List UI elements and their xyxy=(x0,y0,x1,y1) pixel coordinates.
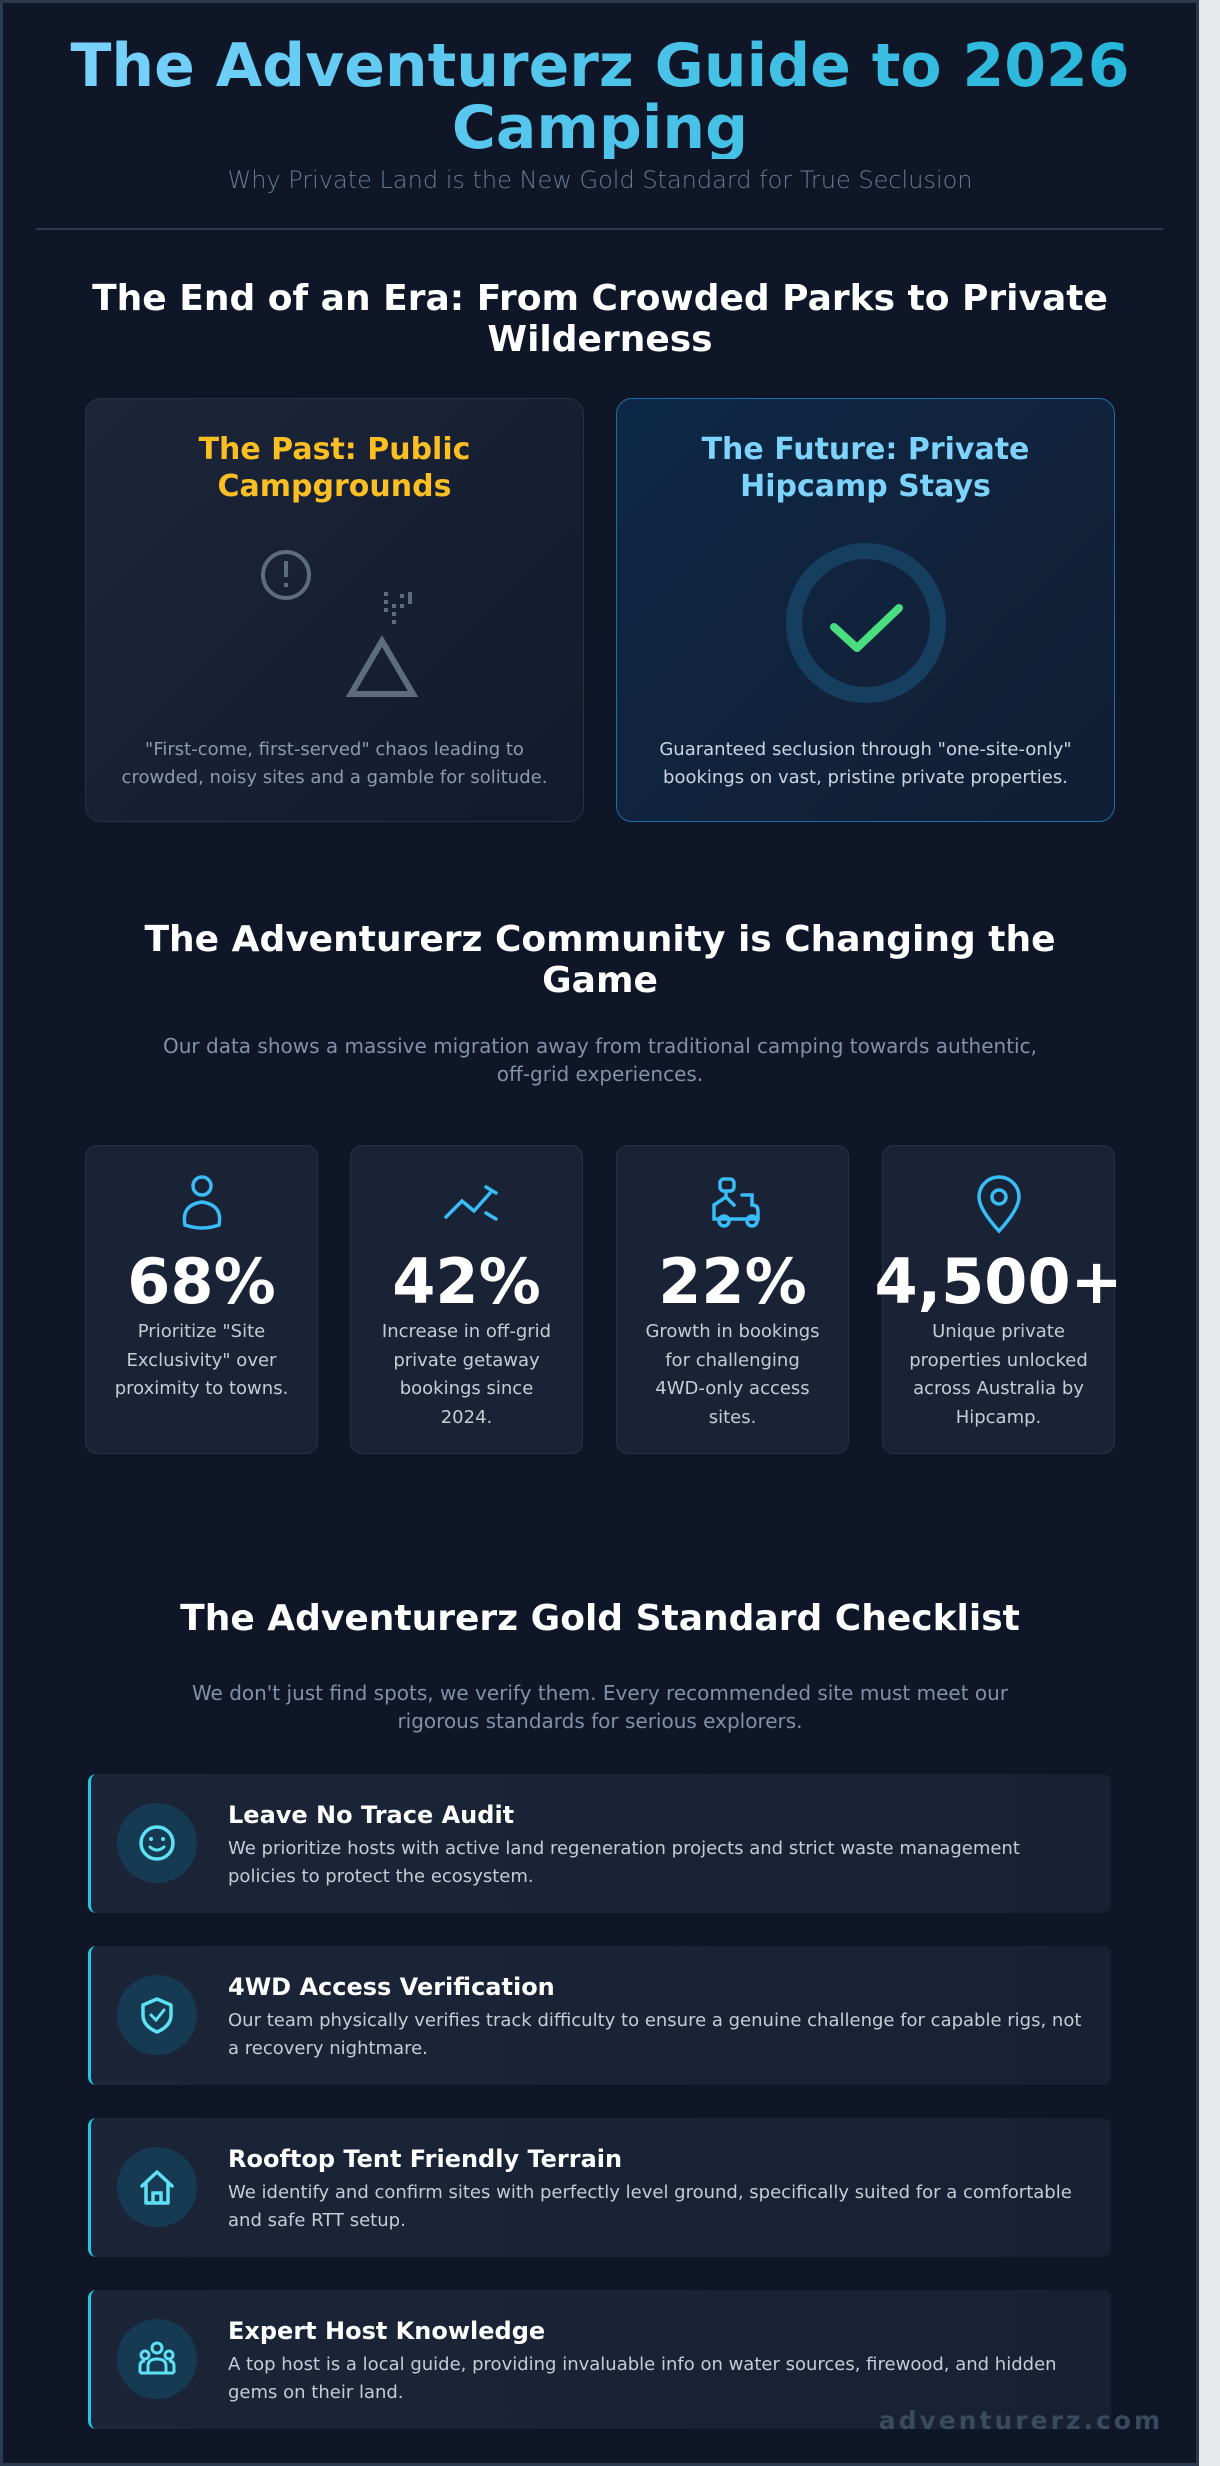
icon: crowd chaos xyxy=(261,550,418,697)
stat: 4,500+: properties unlocked xyxy=(909,1350,1088,1370)
checklist item: 4wd xyxy=(88,1946,1111,2085)
section heading: end of an era: Wilderness xyxy=(487,319,713,360)
section heading: checklist: The Adventurerz Gold Standard Checklist xyxy=(180,1598,1020,1639)
icon: map pin xyxy=(977,1175,1021,1234)
text: checklist intro: We don't just find spots, we verify them. Every recommended site must meet our xyxy=(192,1681,1008,1705)
stat: 68% xyxy=(85,1145,318,1454)
section heading: end of an era xyxy=(92,278,1108,360)
checklist item: expert host: Expert Host Knowledge xyxy=(228,2317,545,2345)
stat: 4,500+: Unique private xyxy=(932,1321,1065,1342)
checklist item: expert host: gems on their land. xyxy=(228,2382,404,2403)
checklist item: rooftop tent xyxy=(88,2118,1111,2257)
stat: 4,500+: across Australia by xyxy=(913,1378,1084,1399)
checklist item: leave no trace xyxy=(88,1774,1111,1913)
heading: future xyxy=(702,432,1029,504)
panel: future xyxy=(616,398,1115,822)
stat: 68%: Exclusivity" over xyxy=(127,1350,276,1370)
checklist item: expert host xyxy=(88,2290,1111,2429)
heading: past: Campgrounds xyxy=(218,469,451,504)
heading: future: Hipcamp Stays xyxy=(740,469,991,504)
text: checklist intro xyxy=(192,1681,1008,1733)
panel: past xyxy=(85,398,584,822)
stat: 42%: private getaway xyxy=(393,1350,540,1370)
stat: 22%: 4WD-only access xyxy=(655,1378,810,1399)
section heading: community: Game xyxy=(542,960,658,1001)
section heading: community: The Adventurerz Community is Changing the xyxy=(144,919,1056,960)
title xyxy=(20,35,1180,159)
icon: trend xyxy=(444,1185,498,1221)
watermark: adventurerz.com xyxy=(879,2406,1163,2435)
icon: person xyxy=(182,1175,222,1230)
text: checklist intro: rigorous standards for serious explorers. xyxy=(397,1709,803,1733)
checklist item: leave no trace: policies to protect the ecosystem. xyxy=(228,1866,534,1887)
stat: 68%: Prioritize "Site xyxy=(138,1321,265,1342)
icon: 4wd xyxy=(712,1177,760,1228)
text: past: crowded, noisy sites and a gamble for solitude. xyxy=(122,767,547,788)
stat: 42%: 2024. xyxy=(441,1406,492,1428)
checklist item: 4wd: Our team physically verifies track difficulty to ensure a genuine challenge for capable rigs, not xyxy=(228,2010,1081,2031)
stat: 22%: for challenging xyxy=(665,1350,800,1370)
title: The Adventurerz Guide to 2026 xyxy=(70,31,1130,101)
stat: 22%: Growth in bookings xyxy=(645,1321,820,1342)
text: past xyxy=(122,739,547,788)
checklist item: rooftop tent: We identify and confirm sites with perfectly level ground, specifically suited for a comfortable xyxy=(228,2182,1072,2203)
subtitle: Why Private Land is the New Gold Standard for True Seclusion xyxy=(227,166,973,194)
icon: check circle xyxy=(786,543,946,703)
stat: 42%: Increase in off-grid xyxy=(382,1321,551,1342)
checklist item: rooftop tent: Rooftop Tent Friendly Terrain xyxy=(228,2145,622,2173)
checklist item: leave no trace: We prioritize hosts with active land regeneration projects and strict waste management xyxy=(228,1838,1020,1859)
text: community intro xyxy=(163,1034,1037,1086)
stat: 42%: bookings since xyxy=(400,1378,533,1399)
text: community intro: Our data shows a massive migration away from traditional camping towards authentic, xyxy=(163,1034,1037,1058)
stat: 4,500+: Hipcamp. xyxy=(956,1406,1041,1428)
stat: 4,500+ xyxy=(882,1145,1115,1454)
stat: 22%: 22% xyxy=(658,1245,807,1318)
heading: past xyxy=(198,432,470,504)
stat: 68%: 68% xyxy=(127,1245,276,1318)
text: future: bookings on vast, pristine private properties. xyxy=(663,767,1068,788)
stat: 22% xyxy=(616,1145,849,1454)
heading: future: The Future: Private xyxy=(702,432,1029,467)
stat: 68%: proximity to towns. xyxy=(115,1378,288,1399)
icon: group xyxy=(117,2319,197,2399)
stat: 42%: 42% xyxy=(392,1245,541,1318)
checklist item: 4wd: a recovery nightmare. xyxy=(228,2038,428,2059)
section heading: community xyxy=(144,919,1056,1001)
text: future: Guaranteed seclusion through "one-site-only" xyxy=(659,739,1072,760)
icon: shield xyxy=(117,1975,197,2055)
text: future xyxy=(659,739,1072,788)
heading: past: The Past: Public xyxy=(199,432,470,467)
text: past: "First-come, first-served" chaos leading to xyxy=(145,739,524,760)
title: Camping xyxy=(452,93,748,163)
checklist item: expert host: A top host is a local guide, providing invaluable info on water sources, firewood, and hidden xyxy=(228,2354,1057,2375)
icon: house xyxy=(117,2147,197,2227)
checklist item: rooftop tent: and safe RTT setup. xyxy=(228,2210,406,2231)
stat: 42% xyxy=(350,1145,583,1454)
checklist item: leave no trace: Leave No Trace Audit xyxy=(228,1801,514,1829)
checklist item: 4wd: 4WD Access Verification xyxy=(228,1973,555,2001)
stat: 22%: sites. xyxy=(709,1406,756,1428)
icon: smile xyxy=(117,1803,197,1883)
stat: 4,500+: 4,500+ xyxy=(874,1245,1123,1318)
section heading: end of an era: The End of an Era: From Crowded Parks to Private xyxy=(92,278,1108,319)
text: community intro: off-grid experiences. xyxy=(497,1062,703,1086)
